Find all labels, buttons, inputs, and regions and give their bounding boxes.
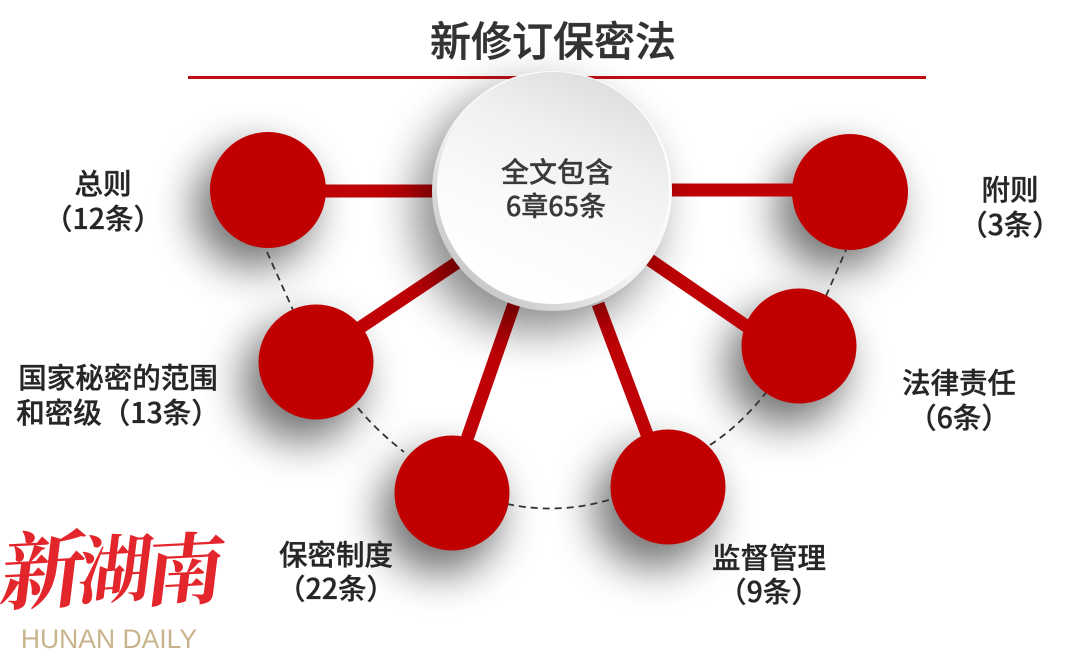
logo: Hunan Daily bbox=[0, 503, 232, 652]
label: 国家秘密的范围和密级 bbox=[16, 356, 220, 432]
centre circle bbox=[432, 71, 672, 311]
title: 新修订保密法 bbox=[430, 8, 676, 68]
label: 附则: （3条） bbox=[959, 203, 1061, 244]
logo: Hunan Daily: 湖 bbox=[73, 509, 160, 620]
logo: Hunan Daily: 南 bbox=[140, 507, 232, 623]
label: 国家秘密的范围和密级: 和密级（13条） bbox=[16, 391, 220, 432]
label: 保密制度 bbox=[277, 533, 395, 608]
dashed arc connecting outer circles bbox=[267, 250, 846, 508]
centre circle shadow bbox=[414, 88, 658, 332]
centre circle: 6章65条 bbox=[506, 185, 606, 224]
label: 监督管理 bbox=[712, 536, 826, 611]
centre text: 全文包含 bbox=[501, 151, 613, 191]
label: 国家秘密的范围和密级: 国家秘密的范围 bbox=[18, 356, 218, 397]
label: 总则 bbox=[44, 162, 162, 238]
label: 保密制度: 保密制度 bbox=[279, 533, 393, 574]
node: 附则 bbox=[792, 134, 908, 250]
node: 保密制度 bbox=[394, 436, 510, 550]
node: 国家秘密的范围和密级 bbox=[258, 304, 374, 420]
label: 附则 bbox=[959, 168, 1061, 244]
label: 附则: 附则 bbox=[981, 168, 1039, 209]
node: 总则 bbox=[210, 132, 326, 248]
label: 法律责任: （6条） bbox=[908, 396, 1010, 437]
label: 监督管理: 监督管理 bbox=[712, 536, 826, 577]
node: 法律责任 bbox=[742, 288, 856, 404]
label: 法律责任: 法律责任 bbox=[902, 361, 1016, 402]
node: 监督管理 bbox=[610, 430, 726, 544]
title rule bbox=[188, 76, 926, 79]
circle shadows bbox=[194, 148, 896, 574]
label: 法律责任 bbox=[902, 361, 1016, 437]
label: 总则: 总则 bbox=[74, 162, 132, 203]
label: 保密制度: （22条） bbox=[277, 567, 395, 608]
spokes bbox=[320, 190, 800, 442]
label: 总则: （12条） bbox=[44, 197, 162, 238]
label: 监督管理: （9条） bbox=[718, 570, 820, 611]
